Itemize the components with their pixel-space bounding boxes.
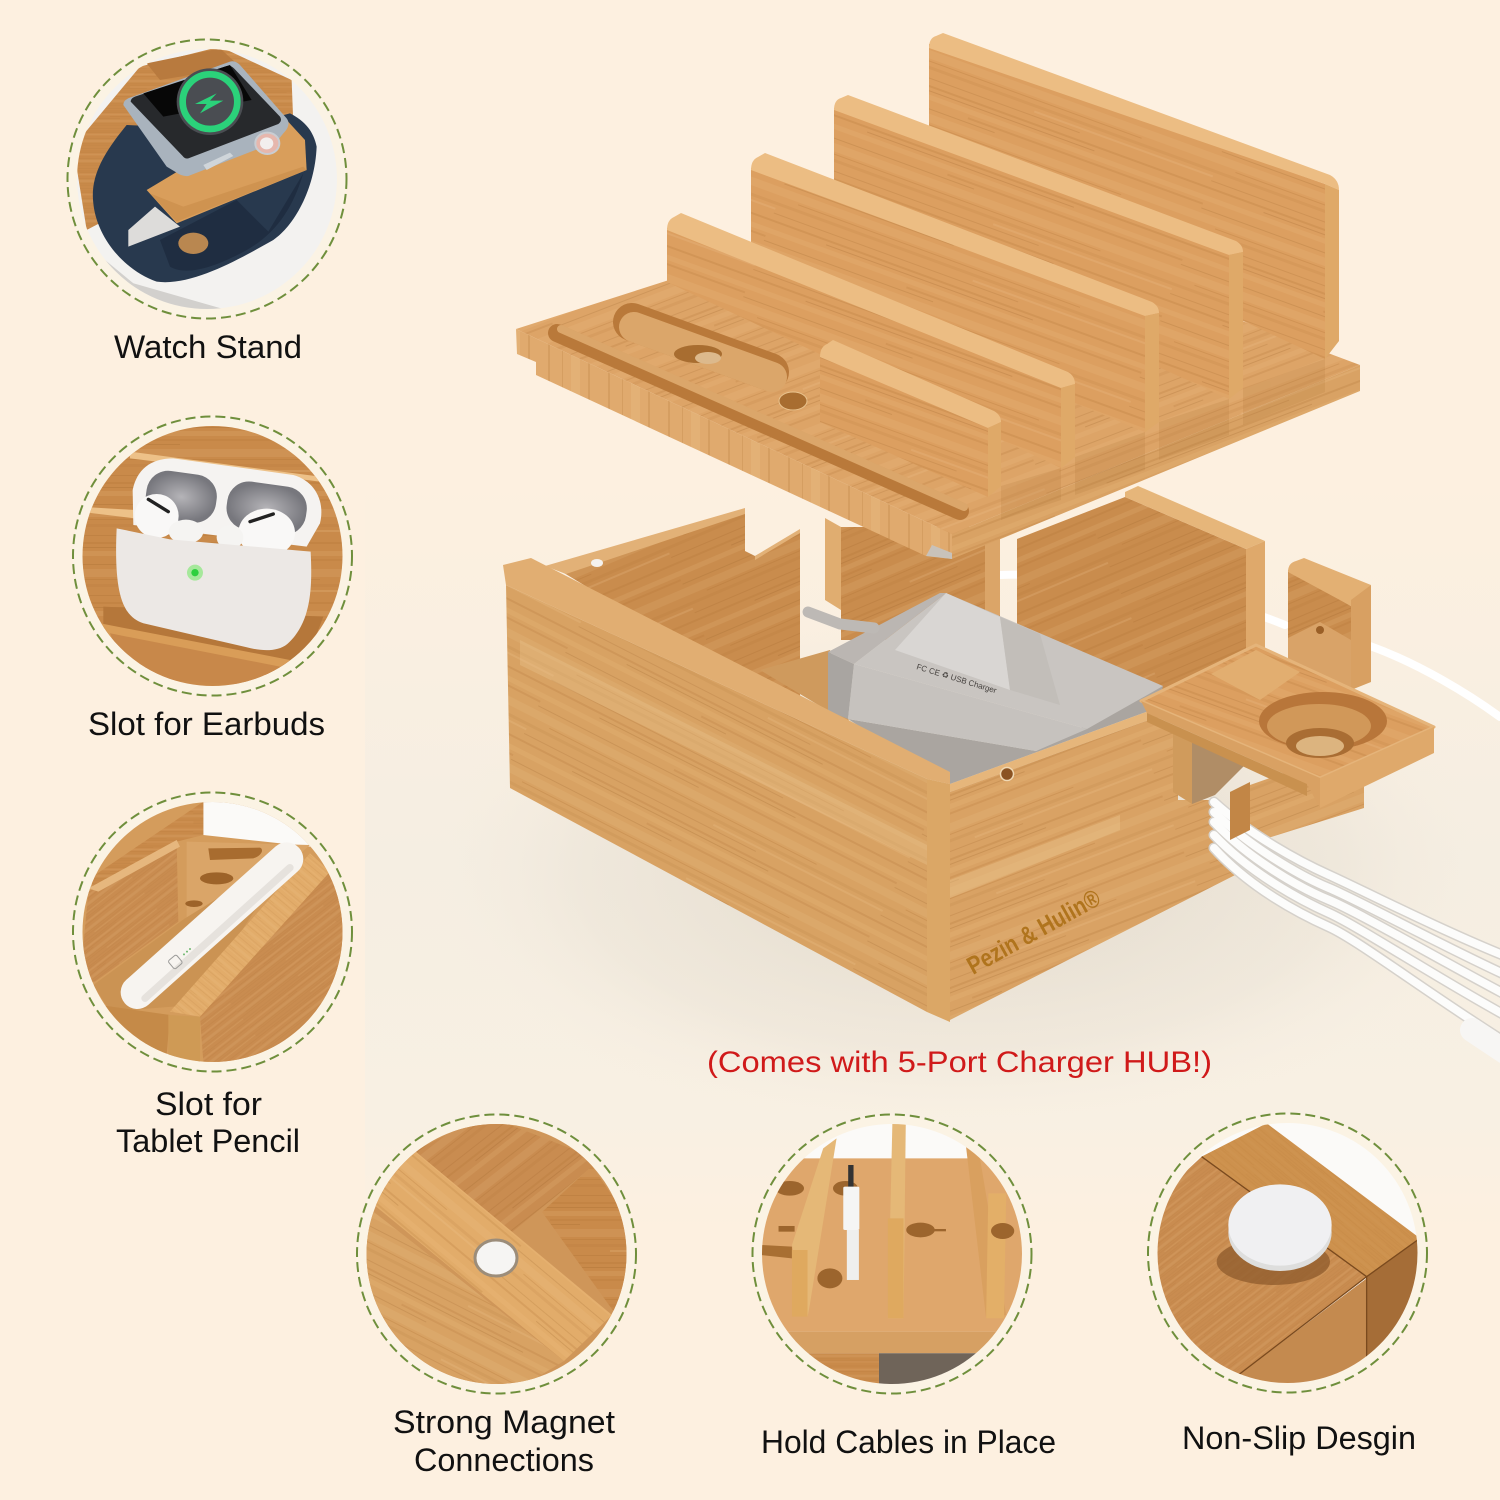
round cable hole [779,392,807,410]
magnet disc [475,1240,517,1276]
cable holder photo [762,1124,1022,1384]
earbud pocket [632,322,772,377]
feature: tablet pencil slot [70,790,360,1159]
feature: hold cables [750,1110,1056,1460]
divider 3 [751,153,1159,432]
dock top [1141,645,1434,778]
white power cable behind box [1000,575,1500,717]
divider 4 [667,213,1075,468]
back post [825,518,1000,640]
dock circular pocket [1259,692,1387,750]
cable holder label: Hold Cables in Place [761,1424,1056,1460]
feature: strong magnet [357,1110,640,1478]
feature: earbuds slot [70,410,360,742]
watch stand label: Watch Stand [114,329,302,365]
shading between dividers [1001,359,1325,520]
earbuds photo [82,426,342,686]
pencil slot label: Slot for [155,1086,262,1122]
bundle of white charging cables [1214,802,1500,1052]
charger cord [808,612,874,628]
cable connector [1472,1030,1500,1052]
USB cable [848,1165,854,1188]
pencil slot photo [82,802,342,1062]
earbuds label: Slot for Earbuds [88,706,325,742]
apple-shaped hole [674,345,722,363]
box floor [760,650,860,730]
divider 5 (short front) [820,340,1001,497]
divider 2 [834,95,1243,399]
box outer right face [950,708,1243,1020]
rear upright of watch dock [1288,558,1371,690]
back right wall [1017,486,1265,690]
magnet hole [1000,768,1014,780]
middle divider [890,1124,906,1298]
magnet label [393,1404,615,1478]
brand engraving: Pezin & Hulin® [962,884,1106,980]
red caption: (Comes with 5-Port Charger HUB!) [707,1046,1212,1079]
pencil slot label [116,1086,300,1159]
floor shadow [420,610,1500,1130]
non-slip photo [1158,1123,1418,1383]
feature: non-slip design [1148,1114,1430,1456]
dock ridge [1211,650,1300,700]
box outer left face [503,558,950,1022]
box rear right block [1230,745,1364,850]
watch dock module [1141,645,1434,840]
pencil slot [557,329,964,511]
watch stand photo [73,47,337,317]
left inner wall with cable notch [545,508,800,700]
feature: watch stand [68,40,346,365]
non-slip label: Non-Slip Desgin [1182,1420,1416,1456]
right divider [966,1147,1006,1318]
dock bracket [1173,731,1192,804]
pencil slot label: Tablet Pencil [116,1123,300,1159]
magnet label: Connections [414,1442,594,1478]
magnet photo [366,1124,626,1384]
product illustration: exploded bamboo charging station [420,33,1500,1130]
charger label: FC CE ♻ USB Charger [915,662,998,695]
upper tray plate [516,200,1360,559]
left divider [792,1138,837,1317]
magnet label: Strong Magnet [393,1404,615,1440]
divider 1 (rear) [929,33,1339,359]
grey USB charger hub [808,593,1163,784]
